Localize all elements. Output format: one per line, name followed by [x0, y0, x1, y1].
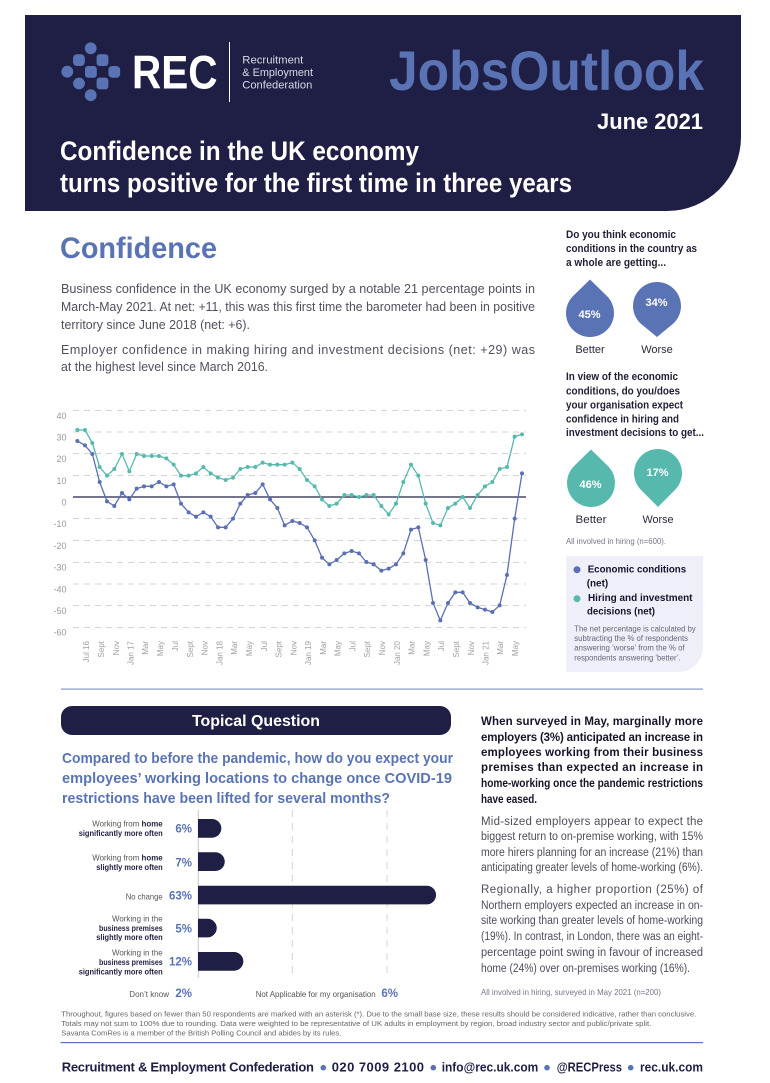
question: hiring confidence: confidence in hiring and	[566, 414, 679, 426]
x-axis labels: Mar	[408, 641, 416, 655]
other response: not applicable 6%: Not Applicable for my organisation	[256, 990, 376, 999]
topical commentary: mid-sized employers: more hirers planning for an increase (21%) than	[481, 847, 703, 859]
bar: home slightly 7%: slightly more often	[96, 863, 163, 872]
bar: no change 63%: No change	[126, 892, 163, 901]
header banner	[25, 15, 741, 211]
y-axis labels	[53, 411, 66, 638]
topical commentary: regional: percentage point swing in favour of increased	[481, 947, 703, 959]
y-axis labels: -60	[53, 628, 66, 638]
topical commentary: lead: premises than expected an increase in	[481, 762, 703, 774]
question: hiring confidence: In view of the economic	[566, 371, 678, 383]
question: economic conditions: Do you think economic	[566, 229, 676, 241]
icon: drop economic better 45%	[566, 280, 614, 337]
topical commentary: regional: Regionally, a higher proportion (25%) of	[481, 884, 704, 896]
footnotes: Savanta ComRes is a member of the British Polling Council and abides by its rules.	[61, 1029, 341, 1038]
bar: premises slightly 5%: Working in the	[112, 914, 163, 923]
label: better: Better	[575, 344, 605, 356]
y-axis labels: 0	[61, 498, 66, 508]
headline: Confidence in the UK economy	[60, 136, 419, 166]
bar: home slightly 7%: 7%	[175, 858, 192, 870]
x-axis labels: May	[156, 641, 165, 656]
x-axis labels: Jan 17	[126, 640, 136, 665]
x-axis labels: Nov	[467, 641, 476, 655]
section heading: Confidence: Confidence	[60, 232, 217, 265]
icon: drop hiring worse 17%: 17%	[646, 467, 669, 479]
x-axis labels: Jan 21	[482, 640, 490, 665]
bar: premises significantly 12%: Working in the	[112, 949, 163, 958]
legend note: The net percentage is calculated by	[574, 625, 696, 634]
x-axis labels: Jul	[171, 641, 180, 651]
x-axis labels: Sept	[363, 640, 372, 657]
legend note: subtracting the % of respondents	[574, 634, 688, 643]
topical commentary: lead	[481, 716, 703, 806]
logo organisation name: Recruitment	[242, 54, 303, 66]
topical question heading: employees’ working locations to change once COVID-19	[62, 770, 452, 787]
x-axis labels: Nov	[290, 641, 298, 655]
label: worse: Worse	[641, 344, 673, 356]
icon: drop economic better 45%: 45%	[578, 309, 601, 321]
other response: don't know 2%: 2%	[175, 988, 192, 1000]
topical commentary: regional: home (24%) over on-premises working (16%).	[481, 963, 690, 975]
line: economic conditions	[77, 441, 522, 620]
bar: home slightly 7%	[92, 852, 225, 872]
bar: no change 63%: 63%	[169, 891, 192, 903]
confidence body text: Employer confidence in making hiring and investment decisions (net: +29) was	[61, 343, 535, 357]
topical commentary: mid-sized employers: Mid-sized employers appear to expect the	[481, 816, 703, 828]
topical commentary: lead: home-working once the pandemic restrictions	[481, 778, 703, 790]
footer contact bar: 020 7009 2100	[332, 1060, 424, 1075]
section divider	[61, 688, 703, 690]
footer contact bar: rec.uk.com	[640, 1060, 703, 1075]
topical commentary: lead: When surveyed in May, marginally more	[481, 716, 703, 728]
topical commentary: regional	[481, 884, 704, 975]
bar: home significantly 6%: 6%	[175, 824, 192, 836]
x-axis labels: May	[245, 641, 254, 656]
y-axis labels: -10	[53, 519, 66, 529]
legend note: respondents answering ‘better’.	[574, 653, 681, 662]
chart axis lines	[197, 810, 199, 978]
icon: REC logo mark	[61, 42, 120, 101]
topical question heading: Compared to before the pandemic, how do you expect your	[62, 750, 453, 767]
topical commentary: regional: Northern employers expected an increase in on-	[481, 900, 703, 912]
other response: don't know 2%	[129, 988, 192, 1000]
topical commentary: mid-sized employers: biggest return to on-premise working, with 15%	[481, 831, 703, 843]
x-axis labels: Jan 18	[216, 640, 224, 665]
x-axis labels: Nov	[200, 641, 210, 655]
line chart	[53, 410, 526, 665]
topical commentary: regional: (19%). In contrast, in London, there was an eight-	[481, 931, 703, 943]
topical commentary: lead: have eased.	[481, 794, 537, 806]
question: economic conditions	[566, 229, 697, 269]
x-axis labels: Jul	[437, 641, 446, 651]
logo organisation name	[242, 54, 313, 92]
footnotes: Totals may not sum to 100% due to rounding. Data were weighted to be representative of UK adults in employment by region, broad industry sector and public/private split.	[61, 1019, 651, 1028]
x-axis labels: Sept	[452, 640, 461, 657]
question: hiring confidence: investment decisions to get...	[566, 427, 704, 439]
footer contact bar: @RECPress	[557, 1060, 622, 1075]
bar: premises significantly 12%: significantly more often	[79, 968, 163, 977]
topical question bar: Topical Question	[192, 713, 320, 730]
y-axis labels: -50	[53, 606, 66, 616]
panel: legend	[566, 556, 703, 672]
x-axis labels: Sept	[186, 640, 195, 657]
legend text: hiring: Hiring and investment	[588, 592, 693, 604]
icon: drop hiring better 46%	[567, 450, 615, 507]
x-axis labels: Mar	[496, 641, 505, 655]
x-axis labels	[82, 640, 520, 665]
topical commentary: mid-sized employers	[481, 816, 703, 874]
publication date: June 2021	[597, 109, 703, 134]
x-axis labels: May	[422, 641, 432, 656]
legend text: hiring	[587, 592, 693, 618]
logo wordmark: REC	[132, 46, 218, 100]
y-axis labels: -40	[53, 584, 66, 594]
topical commentary: lead: employees working from their business	[481, 747, 703, 759]
confidence body text: territory since June 2018 (net: +6).	[61, 318, 250, 332]
bar: home slightly 7%: Working from home	[92, 853, 163, 862]
label: worse: Worse	[642, 514, 674, 526]
question: hiring confidence: your organisation expect	[566, 400, 683, 412]
confidence body text: at the highest level since March 2016.	[61, 360, 268, 374]
question: hiring confidence	[566, 371, 704, 439]
icon: drop economic worse 34%	[633, 282, 681, 337]
bar chart	[79, 810, 436, 1000]
bar: premises significantly 12%: 12%	[169, 957, 192, 969]
legend text: economic: (net)	[587, 578, 608, 590]
publication title: JobsOutlook	[389, 39, 705, 102]
x-axis labels: Mar	[230, 641, 239, 655]
icon: drop economic worse 34%: 34%	[645, 297, 668, 309]
legend text: hiring: decisions (net)	[587, 606, 655, 618]
y-axis labels: 40	[56, 411, 66, 421]
legend text: economic	[587, 564, 686, 590]
footer contact bar: Recruitment & Employment Confederation	[62, 1060, 314, 1075]
y-axis labels: 30	[56, 432, 66, 442]
headline: turns positive for the first time in three years	[60, 168, 572, 198]
y-axis labels: 20	[56, 454, 66, 464]
topical question bar	[61, 706, 451, 735]
logo organisation name: & Employment	[242, 67, 313, 79]
legend text: economic: Economic conditions	[588, 564, 686, 576]
footnotes: Throughout, figures based on fewer than 50 respondents are marked with an asterisk (*). Due to the small base size, these results should be considered indicative, rather than conclusive.	[61, 1010, 696, 1019]
y-axis labels: -20	[53, 541, 66, 551]
logo divider	[229, 42, 230, 102]
bar: premises slightly 5%	[96, 914, 217, 942]
x-axis labels: Jul 16	[82, 640, 91, 662]
confidence body text: March-May 2021. At net: +11, this was this first time the barometer had been in positive	[61, 300, 535, 314]
bar: premises significantly 12%: business premises	[99, 958, 163, 967]
bar: home significantly 6%: significantly more often	[79, 829, 163, 838]
bar: home significantly 6%	[79, 819, 221, 838]
other response: not applicable 6%	[256, 988, 398, 1000]
legend note: answering ‘worse’ from the % of	[574, 644, 685, 653]
x-axis labels: Sept	[97, 640, 106, 657]
x-axis labels: Mar	[319, 641, 328, 655]
legend note	[574, 625, 696, 662]
footer contact bar: info@rec.uk.com	[442, 1060, 538, 1075]
bar: premises slightly 5%: business premises	[99, 924, 163, 933]
topical commentary: lead: employers (3%) anticipated an increase in	[481, 732, 703, 744]
bar: home significantly 6%: Working from home	[92, 820, 163, 829]
x-axis labels: Jul	[348, 641, 358, 651]
footnotes	[61, 1010, 696, 1038]
x-axis labels: Jul	[260, 641, 269, 651]
bar: premises slightly 5%: 5%	[175, 924, 192, 936]
x-axis labels: May	[334, 641, 342, 656]
x-axis labels: Sept	[274, 640, 284, 657]
confidence body text	[61, 282, 535, 374]
legend dot: hiring	[574, 595, 580, 602]
x-axis labels: Nov	[378, 641, 387, 655]
other response: don't know 2%: Don’t know	[129, 990, 169, 999]
y-axis labels: 10	[56, 476, 66, 486]
sample note: All involved in hiring (n=600).	[566, 537, 666, 546]
y-axis gridlines	[73, 410, 526, 628]
legend dot: economic	[574, 566, 580, 573]
topical commentary: regional: site working than greater levels of home-working	[481, 915, 703, 927]
zero line	[73, 496, 526, 498]
icon: drop hiring better 46%: 46%	[579, 479, 602, 491]
data lines	[77, 430, 522, 620]
x-axis labels: Nov	[112, 641, 121, 655]
other response: not applicable 6%: 6%	[381, 988, 398, 1000]
line: hiring and investment decisions	[77, 430, 522, 525]
question: hiring confidence: conditions, do you/does	[566, 386, 680, 398]
bar: no change 63%	[126, 886, 436, 904]
topical sample note: All involved in hiring, surveyed in May 2021 (n=200)	[481, 988, 661, 997]
x-axis labels: Mar	[141, 641, 150, 655]
confidence body text: Business confidence in the UK economy surged by a notable 21 percentage points in	[61, 282, 535, 296]
x-axis labels: May	[511, 641, 520, 656]
headline	[60, 136, 572, 198]
topical commentary: mid-sized employers: anticipating greater levels of home-working (6%).	[481, 862, 703, 874]
x-axis labels: Jan 20	[393, 640, 402, 665]
topical question heading	[62, 750, 453, 807]
x-axis labels: Jan 19	[304, 640, 313, 665]
icon: drop hiring worse 17%	[634, 449, 682, 507]
topical question heading: restrictions have been lifted for several months?	[62, 790, 390, 807]
logo organisation name: Confederation	[242, 80, 312, 92]
bar: premises slightly 5%: slightly more often	[96, 933, 163, 942]
label: better: Better	[576, 514, 607, 526]
y-axis labels: -30	[53, 562, 66, 572]
footer rule	[60, 1042, 703, 1043]
question: economic conditions: a whole are getting...	[566, 257, 666, 269]
bar: premises significantly 12%	[79, 949, 243, 977]
footer contact bar	[62, 1060, 703, 1075]
question: economic conditions: conditions in the country as	[566, 243, 697, 255]
